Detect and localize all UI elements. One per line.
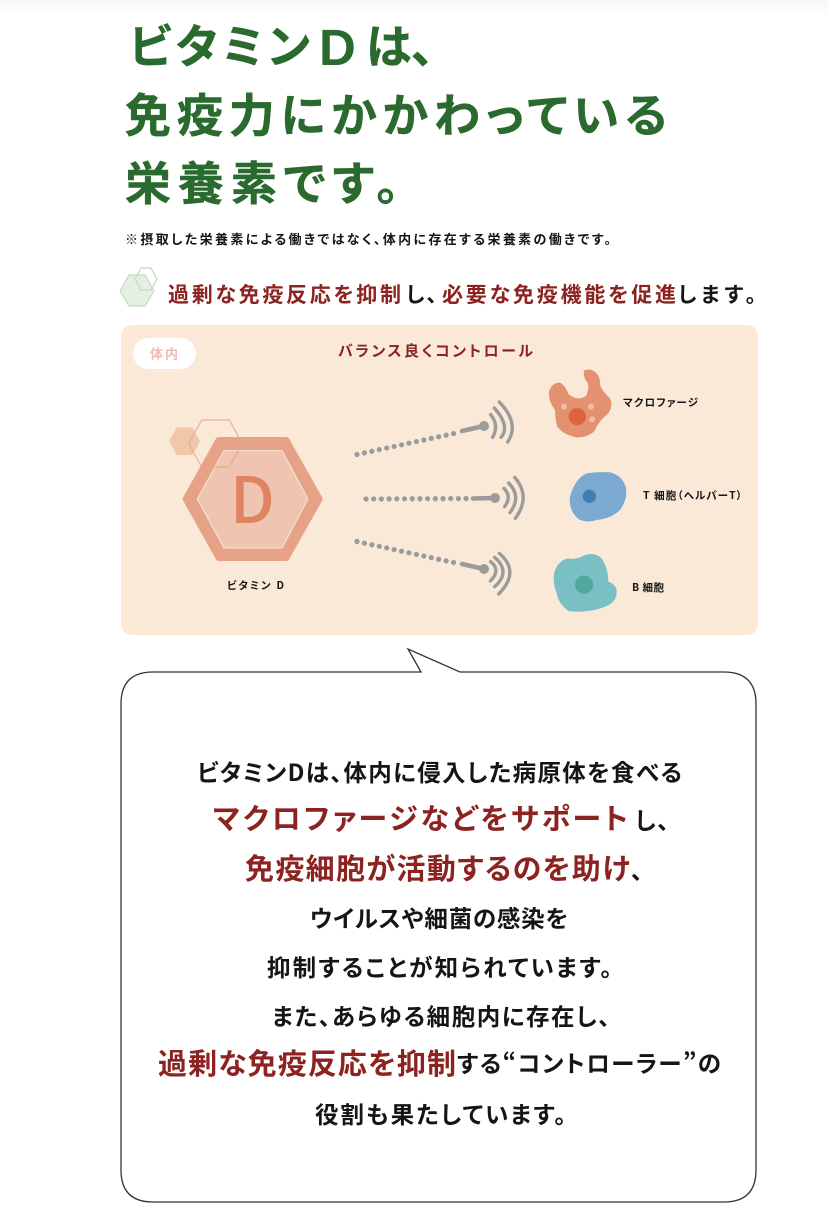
- title: [125, 11, 667, 214]
- body text: ビタミンDは、体内に侵入した病原体を食べる: [197, 754, 682, 788]
- title: ビタミン: [129, 11, 310, 77]
- label: vitamin D: ビタミン D: [227, 578, 284, 593]
- label: T cell: T 細胞（ヘルパーT）: [643, 488, 742, 503]
- title: 免疫力にかかわっている: [125, 80, 667, 146]
- body text: し、: [635, 802, 669, 836]
- body text: 役割も果たしています。: [315, 1096, 566, 1130]
- subheading: 必要な免疫機能を促進: [442, 279, 676, 309]
- footnote: ※摂取した栄養素による働きではなく、体内に存在する栄養素の働きです。: [125, 229, 611, 248]
- icon: T cell: [570, 472, 626, 521]
- title: は: [366, 11, 411, 77]
- body text: マクロファージなどをサポート: [213, 796, 628, 838]
- title: 栄養素です。: [125, 148, 399, 214]
- body text: 抑制することが知られています。: [267, 949, 612, 983]
- label: B cell: B 細胞: [632, 580, 664, 595]
- icon: macrophage: [549, 369, 611, 437]
- icon: vitamin D hexagon: D: [230, 450, 275, 542]
- subheading: [168, 279, 756, 309]
- arrow: signal to macrophage: [357, 402, 512, 454]
- body text: ウイルスや細菌の感染を: [310, 900, 568, 934]
- subheading: します。: [678, 279, 756, 309]
- body text: する“コントローラー”の: [457, 1045, 721, 1079]
- body text: また、あらゆる細胞内に存在し、: [272, 998, 610, 1032]
- panel: body diagram: [121, 325, 758, 635]
- body text: [158, 754, 721, 1130]
- body text: 、: [631, 852, 643, 886]
- title: D: [319, 19, 356, 76]
- subheading: し、: [406, 279, 439, 309]
- arrow: signal to B cell: [357, 542, 510, 594]
- badge: inside the body: [133, 338, 196, 369]
- title: 、: [411, 11, 434, 77]
- arrow: signal to T cell: [366, 477, 523, 518]
- speech bubble: [121, 649, 756, 1202]
- badge: inside the body: 体内: [150, 344, 178, 362]
- body text: 免疫細胞が活動するのを助け: [245, 846, 630, 888]
- icon: green hexagons: [120, 268, 157, 306]
- icon: vitamin D hexagon: [169, 420, 320, 558]
- subheading: 過剰な免疫反応を抑制: [168, 279, 401, 309]
- icon: B cell: [554, 554, 617, 612]
- panel heading: バランス良くコントロール: [338, 340, 533, 361]
- label: macrophage: マクロファージ: [622, 395, 699, 410]
- body text: 過剰な免疫反応を抑制: [158, 1041, 456, 1083]
